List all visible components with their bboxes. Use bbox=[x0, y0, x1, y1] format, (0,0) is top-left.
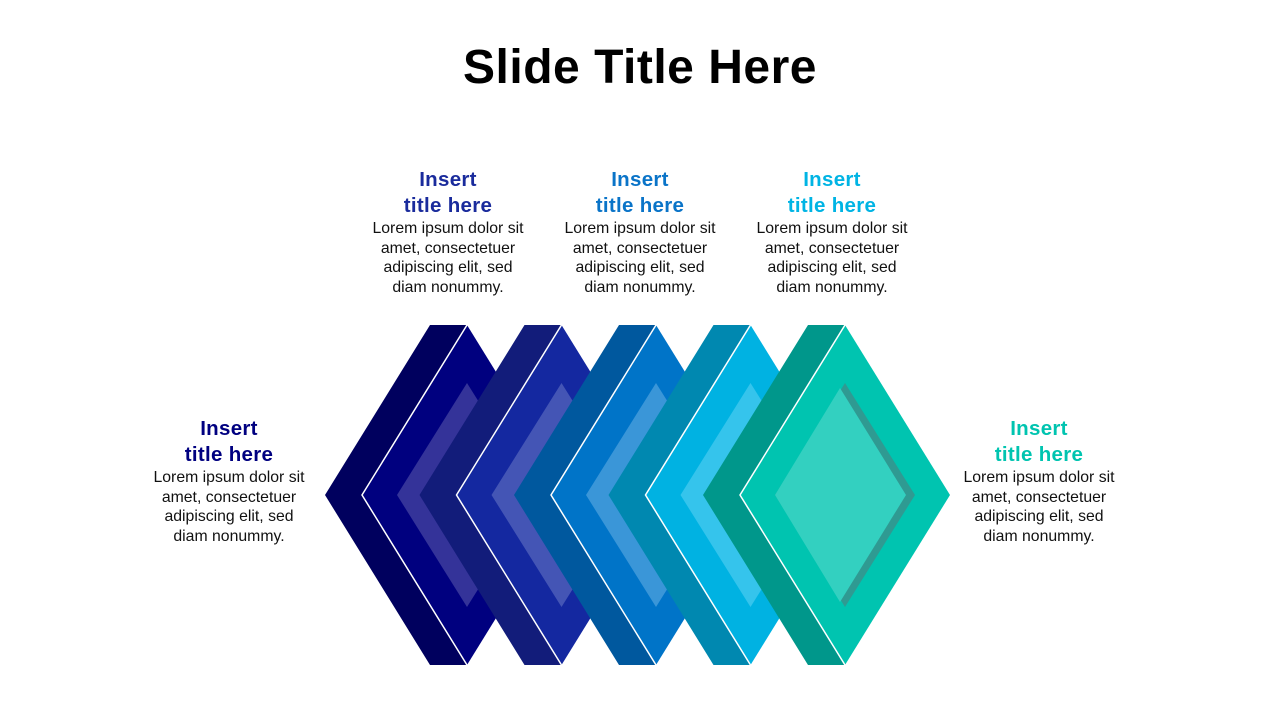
text: left: Insert bbox=[200, 417, 258, 440]
text: top 2: amet, consectetuer bbox=[573, 240, 707, 256]
text: top 3: diam nonummy. bbox=[776, 278, 888, 296]
text: top 2: adipiscing elit, sed bbox=[575, 259, 705, 276]
diamond 5 bbox=[703, 325, 950, 665]
text: top 1: adipiscing elit, sed bbox=[383, 259, 513, 276]
text: right: Lorem ipsum dolor sit bbox=[963, 469, 1114, 486]
diamond 2 bbox=[420, 325, 666, 665]
text: right bbox=[963, 417, 1114, 544]
text: right: diam nonummy. bbox=[983, 528, 1095, 544]
text: top 3 bbox=[756, 168, 908, 296]
text: top 3: Lorem ipsum dolor sit bbox=[756, 220, 908, 237]
text: top 3: amet, consectetuer bbox=[765, 240, 899, 256]
text: left: title here bbox=[185, 443, 273, 466]
text: left bbox=[153, 417, 304, 544]
text: right: amet, consectetuer bbox=[972, 488, 1106, 506]
text: right: Insert bbox=[1010, 417, 1068, 440]
text: top 1: Lorem ipsum dolor sit bbox=[372, 220, 524, 237]
text: top 1: diam nonummy. bbox=[392, 278, 504, 296]
title: Slide Title Here bbox=[463, 41, 817, 94]
text: left: Lorem ipsum dolor sit bbox=[153, 469, 304, 486]
text: top 1: Insert bbox=[419, 168, 477, 191]
text: top 1: title here bbox=[404, 194, 492, 217]
text: right: adipiscing elit, sed bbox=[974, 508, 1104, 525]
text: top 2: Insert bbox=[611, 168, 669, 191]
text: top 3: adipiscing elit, sed bbox=[767, 259, 897, 276]
text: top 2: Lorem ipsum dolor sit bbox=[564, 220, 716, 237]
diamond 1 bbox=[325, 325, 572, 665]
text: top 3: title here bbox=[788, 194, 876, 217]
text: top 1 bbox=[372, 168, 524, 296]
diamond 4 bbox=[608, 325, 856, 665]
text: top 3: Insert bbox=[803, 168, 861, 191]
text: right: title here bbox=[995, 443, 1083, 466]
text: top 2 bbox=[564, 168, 716, 296]
diamond 3 bbox=[514, 325, 761, 665]
text: top 2: title here bbox=[596, 194, 684, 217]
text: left: amet, consectetuer bbox=[162, 488, 296, 506]
text: left: diam nonummy. bbox=[173, 528, 285, 544]
text: top 1: amet, consectetuer bbox=[381, 240, 515, 256]
text: top 2: diam nonummy. bbox=[584, 278, 696, 296]
text: left: adipiscing elit, sed bbox=[164, 508, 294, 525]
